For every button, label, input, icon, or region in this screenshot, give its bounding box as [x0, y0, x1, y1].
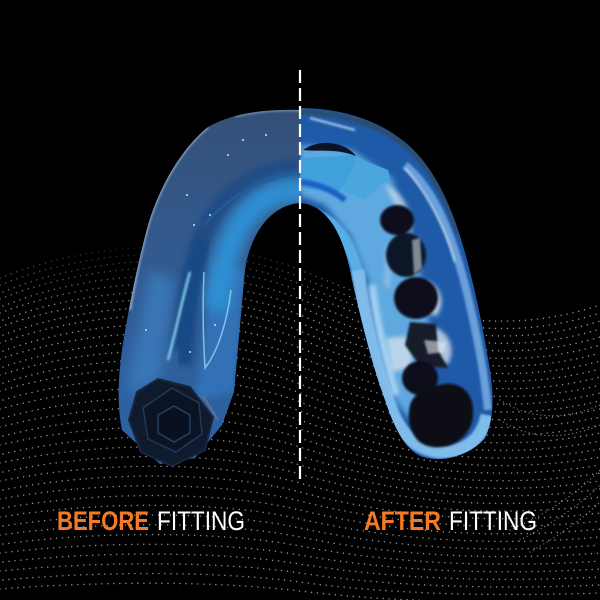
highlight lines	[310, 118, 455, 262]
sparkle specks	[145, 134, 267, 353]
label: after fitting: FITTING	[449, 506, 537, 536]
bright blue arch band	[218, 190, 300, 300]
label: before fitting: FITTING	[157, 506, 245, 536]
dark rim top	[300, 112, 458, 233]
mouthguard: before fitting (left half)	[118, 110, 300, 464]
tooth impressions	[380, 205, 473, 447]
dashed divider line	[299, 70, 301, 480]
bottom pale rim	[358, 270, 487, 452]
leg mid tone	[195, 262, 245, 400]
pale plaster behind teeth	[384, 185, 451, 372]
highlights	[168, 272, 190, 360]
label: after fitting	[364, 506, 537, 536]
darker inner band	[180, 170, 300, 350]
label: after fitting: AFTER	[364, 506, 441, 536]
tooth detail reflections	[412, 238, 446, 354]
outer light strip	[405, 165, 488, 410]
inner arch bright band	[316, 208, 366, 280]
dotted wave background	[0, 247, 600, 600]
tooth facet blocks	[300, 155, 358, 192]
mouthguard: after fitting (right half)	[300, 100, 500, 470]
icon: hexagonal end cap	[129, 379, 218, 466]
blue gum stripe	[300, 182, 345, 200]
dotted swirl lower right	[500, 400, 600, 552]
palate field	[300, 145, 432, 420]
dark centre channel	[184, 240, 203, 365]
label: before fitting	[57, 506, 245, 536]
left leg light area	[125, 270, 176, 395]
label: before fitting: BEFORE	[57, 506, 149, 536]
